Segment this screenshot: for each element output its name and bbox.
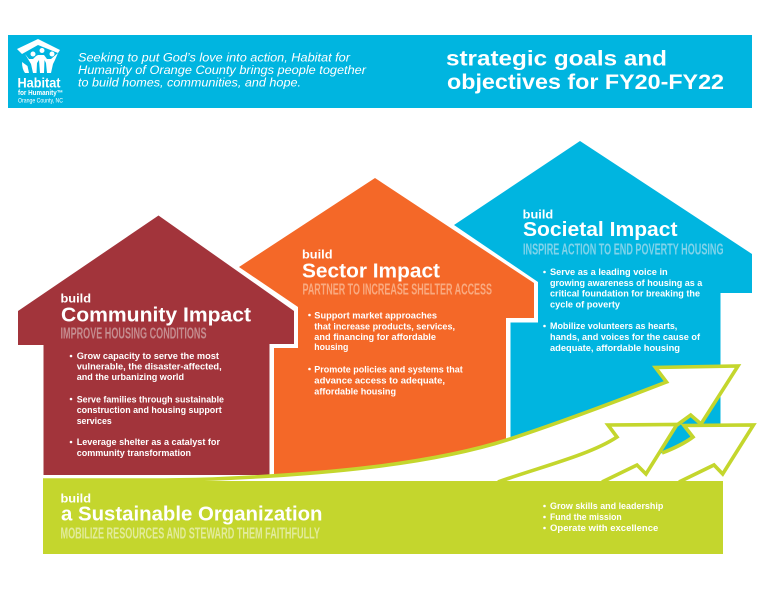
community impact bullets: Serve families through sustainable bbox=[77, 394, 224, 405]
title: strategic goals and bbox=[446, 46, 667, 70]
header banner bbox=[8, 35, 752, 108]
community impact bullets bbox=[70, 351, 224, 459]
panel: sector impact house bbox=[239, 178, 534, 475]
community impact bullets: and the urbanizing world bbox=[77, 372, 184, 383]
tagline text bbox=[78, 52, 367, 90]
societal impact bullets: hands, and voices for the cause of bbox=[550, 332, 701, 343]
panel: sector impact house: PARTNER TO INCREASE SHELTER ACCESS bbox=[302, 281, 492, 298]
panel: sustainable organization bar: MOBILIZE RESOURCES AND STEWARD THEM FAITHFULLY bbox=[60, 526, 320, 543]
sector impact bullets: Support market approaches bbox=[314, 310, 437, 321]
societal impact bullets bbox=[543, 267, 703, 354]
community impact bullets: vulnerable, the disaster-affected, bbox=[77, 361, 222, 372]
icon: Habitat for Humanity logo: for Humanity™ bbox=[18, 90, 63, 97]
societal impact bullets: growing awareness of housing as a bbox=[550, 278, 703, 289]
community impact bullets: community transformation bbox=[77, 448, 191, 459]
sustainable organization bullets: Operate with excellence bbox=[550, 523, 658, 534]
sector impact bullets bbox=[308, 310, 463, 397]
tagline text: Humanity of Orange County brings people together bbox=[78, 65, 367, 77]
community impact bullets: Grow capacity to serve the most bbox=[77, 351, 220, 362]
sector impact bullets: affordable housing bbox=[314, 386, 396, 397]
arrow: right small arrow bbox=[600, 425, 754, 483]
panel: sustainable organization bar: a Sustainable Organization bbox=[61, 503, 322, 526]
sector impact bullets: Promote policies and systems that bbox=[314, 364, 463, 375]
arrow: large swoosh arrow bbox=[43, 366, 738, 483]
sustainable organization bullets: Fund the mission bbox=[550, 512, 622, 523]
societal impact bullets: cycle of poverty bbox=[550, 300, 621, 311]
panel: community impact house: build bbox=[60, 291, 91, 305]
title: objectives for FY20-FY22 bbox=[447, 70, 724, 94]
panel: community impact house: Community Impact bbox=[61, 304, 251, 327]
panel: societal impact house: build bbox=[523, 207, 553, 221]
sector impact bullets: that increase products, services, bbox=[314, 321, 455, 332]
community impact bullets: Leverage shelter as a catalyst for bbox=[77, 437, 220, 448]
community impact bullets: construction and housing support bbox=[77, 405, 222, 416]
panel: community impact house bbox=[18, 216, 294, 475]
panel: sector impact house: Sector Impact bbox=[302, 259, 440, 282]
sustainable organization bullets bbox=[543, 501, 663, 534]
panel: societal impact house bbox=[454, 141, 752, 475]
sector impact bullets: advance access to adequate, bbox=[314, 375, 445, 386]
panel: sustainable organization bar: build bbox=[60, 491, 91, 505]
sector impact bullets: and financing for affordable bbox=[314, 332, 436, 343]
icon: Habitat for Humanity logo bbox=[17, 39, 64, 104]
sustainable organization bullets: Grow skills and leadership bbox=[550, 501, 663, 512]
panel: sector impact house: build bbox=[302, 247, 332, 261]
sector impact bullets: housing bbox=[314, 342, 348, 353]
panel: sustainable organization bar bbox=[43, 481, 723, 554]
icon: Habitat for Humanity logo: Habitat bbox=[18, 74, 61, 90]
panel: community impact house: IMPROVE HOUSING CONDITIONS bbox=[60, 325, 206, 342]
societal impact bullets: Serve as a leading voice in bbox=[550, 267, 668, 278]
societal impact bullets: Mobilize volunteers as hearts, bbox=[550, 321, 677, 332]
societal impact bullets: adequate, affordable housing bbox=[550, 343, 680, 354]
tagline text: to build homes, communities, and hope. bbox=[78, 78, 301, 90]
community impact bullets: services bbox=[77, 416, 112, 427]
societal impact bullets: critical foundation for breaking the bbox=[550, 289, 700, 300]
title bbox=[446, 46, 724, 94]
icon: Habitat for Humanity logo: Orange County, NC bbox=[18, 98, 64, 104]
tagline text: Seeking to put God’s love into action, Habitat for bbox=[78, 52, 351, 64]
arrow: middle small arrow bbox=[498, 424, 677, 483]
panel: societal impact house: Societal Impact bbox=[523, 218, 678, 241]
